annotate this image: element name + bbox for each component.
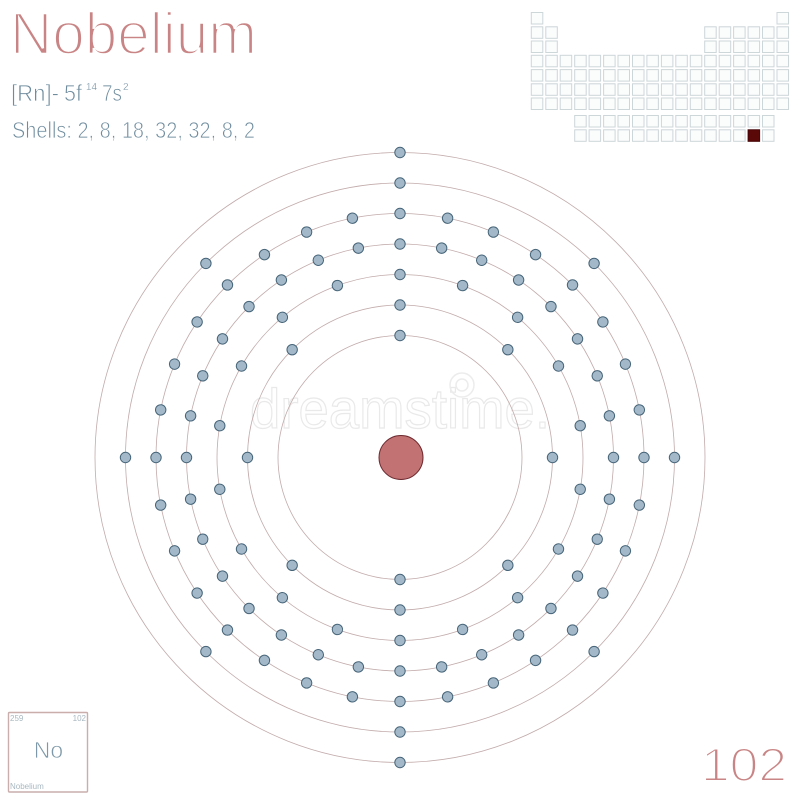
atomic number large: 102	[701, 738, 787, 791]
electron configuration: [Rn]-	[11, 80, 59, 106]
electrons: shell 5	[151, 208, 649, 707]
electrons: shell 1	[395, 330, 405, 585]
atomic number: 102	[73, 714, 87, 723]
electrons: shell 4	[181, 239, 619, 676]
electron configuration: 5f	[64, 80, 83, 106]
electron configuration: 7s	[102, 80, 122, 106]
electrons: shell 6	[120, 178, 680, 737]
shell orbits	[95, 152, 705, 762]
element symbol: No	[34, 737, 63, 763]
atomic mass: 259	[10, 714, 24, 723]
electron configuration: 14	[86, 82, 97, 93]
electrons: shell 7	[395, 147, 405, 768]
electron configuration: 2	[123, 82, 129, 93]
electron shells list: Shells: 2, 8, 18, 32, 32, 8, 2	[12, 117, 255, 143]
title: Nobelium	[10, 1, 257, 67]
element name: Nobelium	[10, 782, 44, 791]
electron configuration	[11, 80, 129, 106]
electrons: shell 2	[242, 300, 558, 615]
nucleus	[379, 436, 423, 480]
electrons: shell 3	[214, 269, 586, 646]
watermark: dreamstime.	[250, 377, 550, 440]
periodic table locator	[531, 12, 788, 141]
element symbol card	[8, 712, 88, 792]
highlighted element: nobelium	[748, 130, 760, 141]
